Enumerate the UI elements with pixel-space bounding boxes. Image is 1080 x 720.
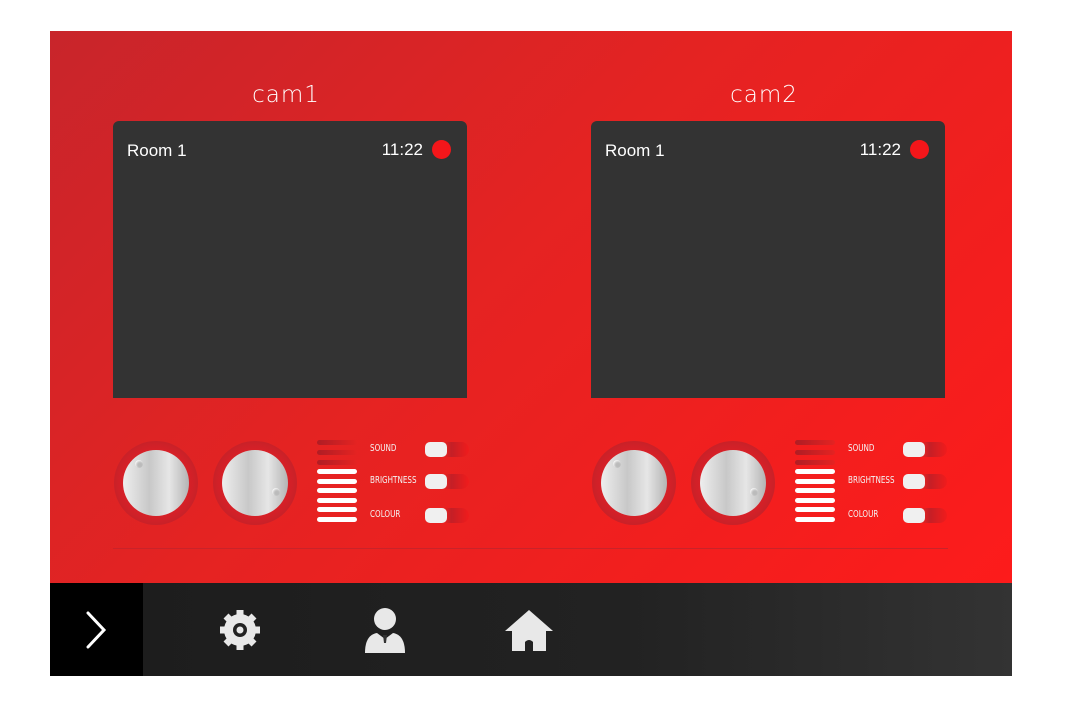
level bars — [317, 440, 357, 522]
knob 2 — [691, 441, 775, 525]
knob 2 — [213, 441, 297, 525]
level bars — [795, 440, 835, 522]
icon: home — [505, 610, 553, 651]
screen: cam2 — [591, 121, 945, 398]
toggles — [425, 442, 469, 457]
bottom nav bar — [50, 583, 1012, 676]
toggle labels: SOUND — [370, 443, 396, 454]
toggle labels: SOUND — [848, 443, 874, 454]
controls: cam1: BRIGHTNESS — [370, 475, 417, 486]
divider line — [113, 548, 948, 549]
screen: cam2: Room 1 — [605, 141, 665, 160]
controls: cam2: BRIGHTNESS — [848, 475, 895, 486]
controls: cam1 — [114, 440, 464, 525]
knob 1 — [592, 441, 676, 525]
knob 1 — [114, 441, 198, 525]
screen: cam1: 11:22 — [382, 140, 423, 159]
arrow button — [50, 583, 143, 676]
icon: user — [365, 608, 405, 653]
icon: gear — [220, 610, 260, 650]
controls: cam2: COLOUR — [848, 509, 878, 520]
toggles — [903, 442, 947, 457]
screen: cam1 — [113, 121, 467, 398]
screen: cam1: Room 1 — [127, 141, 187, 160]
controls: cam2 — [592, 440, 947, 525]
panel: red background — [50, 31, 1012, 583]
controls: cam1: COLOUR — [370, 509, 400, 520]
screen: cam2: 11:22 — [860, 140, 901, 159]
title: cam2: cam2 — [730, 82, 798, 108]
title: cam1: cam1 — [252, 82, 320, 108]
